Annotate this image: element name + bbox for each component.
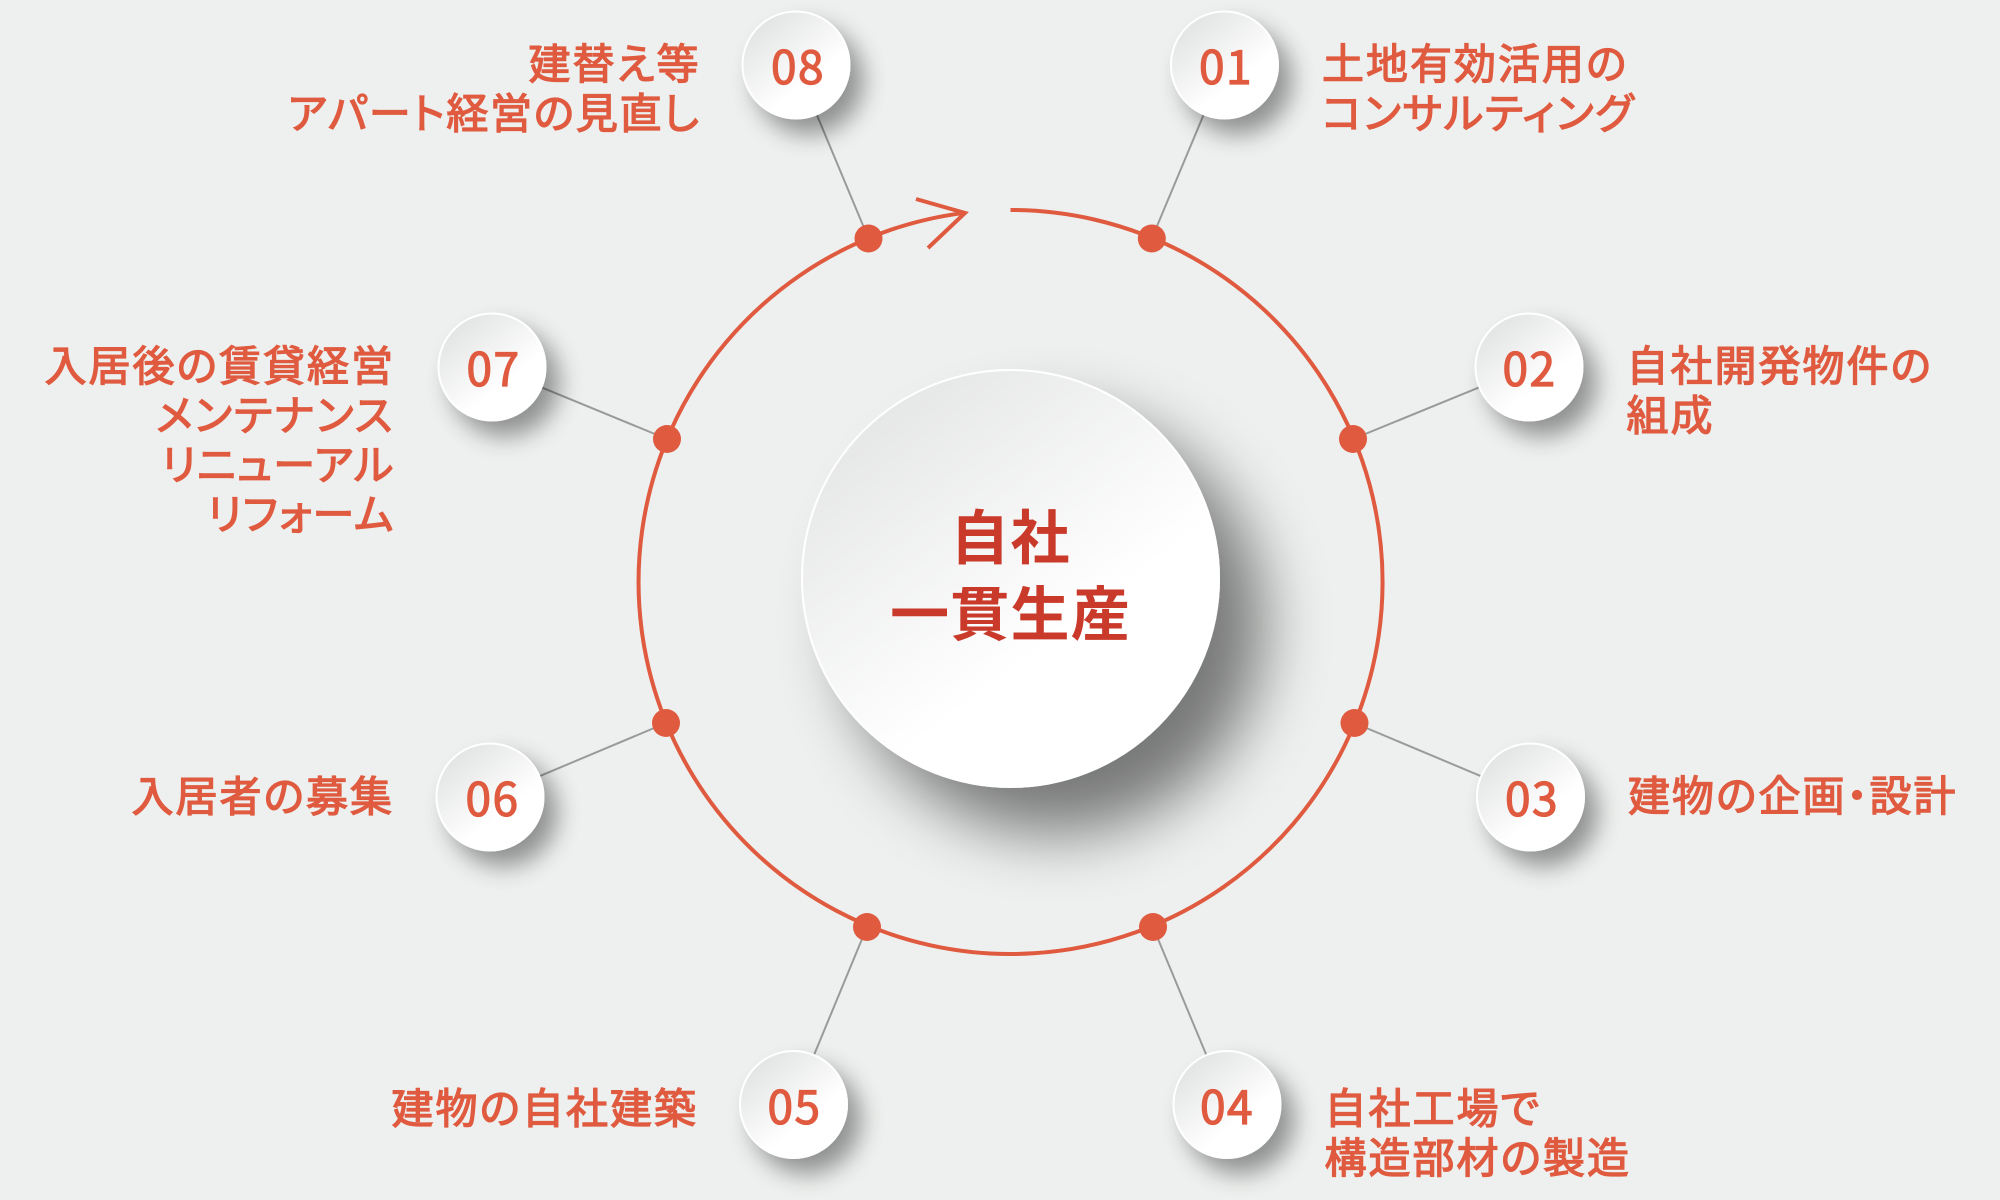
step 05 (392, 913, 881, 1158)
step 07: メンテナンス (156, 382, 394, 444)
step 06 (132, 709, 680, 850)
step 04 (1139, 913, 1631, 1186)
step 08 (288, 12, 882, 252)
center title: 一貫生産 (890, 568, 1131, 652)
step 06: 06 (465, 764, 520, 830)
step 02: 02 (1502, 334, 1557, 400)
center circle (802, 370, 1219, 787)
step 07 (44, 314, 681, 542)
step 05: 建物の自社建築 (392, 1076, 698, 1136)
step 05: 05 (767, 1072, 822, 1138)
step 07: リニューアル (162, 432, 394, 493)
step 04: 構造部材の製造 (1324, 1125, 1631, 1186)
step 07: 07 (466, 334, 521, 400)
step 02: 組成 (1626, 382, 1715, 444)
step 01: コンサルティング (1322, 80, 1636, 142)
step 01: 01 (1199, 32, 1253, 98)
step 03: 03 (1505, 764, 1559, 830)
step 08: 08 (771, 32, 825, 98)
step 08: アパート経営の見直し (288, 80, 700, 142)
center title: 自社 (950, 491, 1071, 576)
step 08: 建替え等 (528, 31, 700, 92)
step 07: リフォーム (207, 482, 394, 542)
step 01 (1138, 12, 1636, 252)
step 01: 土地有効活用の (1322, 31, 1628, 92)
cycle ring with arrow (639, 199, 1383, 954)
step 03 (1340, 709, 1958, 850)
step 03: 建物の企画・設計 (1628, 763, 1958, 824)
step 06: 入居者の募集 (132, 764, 394, 824)
step 07: 入居後の賃貸経営 (44, 333, 395, 394)
step 04: 自社工場で (1324, 1076, 1541, 1136)
step 04: 04 (1200, 1072, 1254, 1138)
step 02: 自社開発物件の (1626, 333, 1933, 394)
step 02 (1339, 314, 1933, 453)
